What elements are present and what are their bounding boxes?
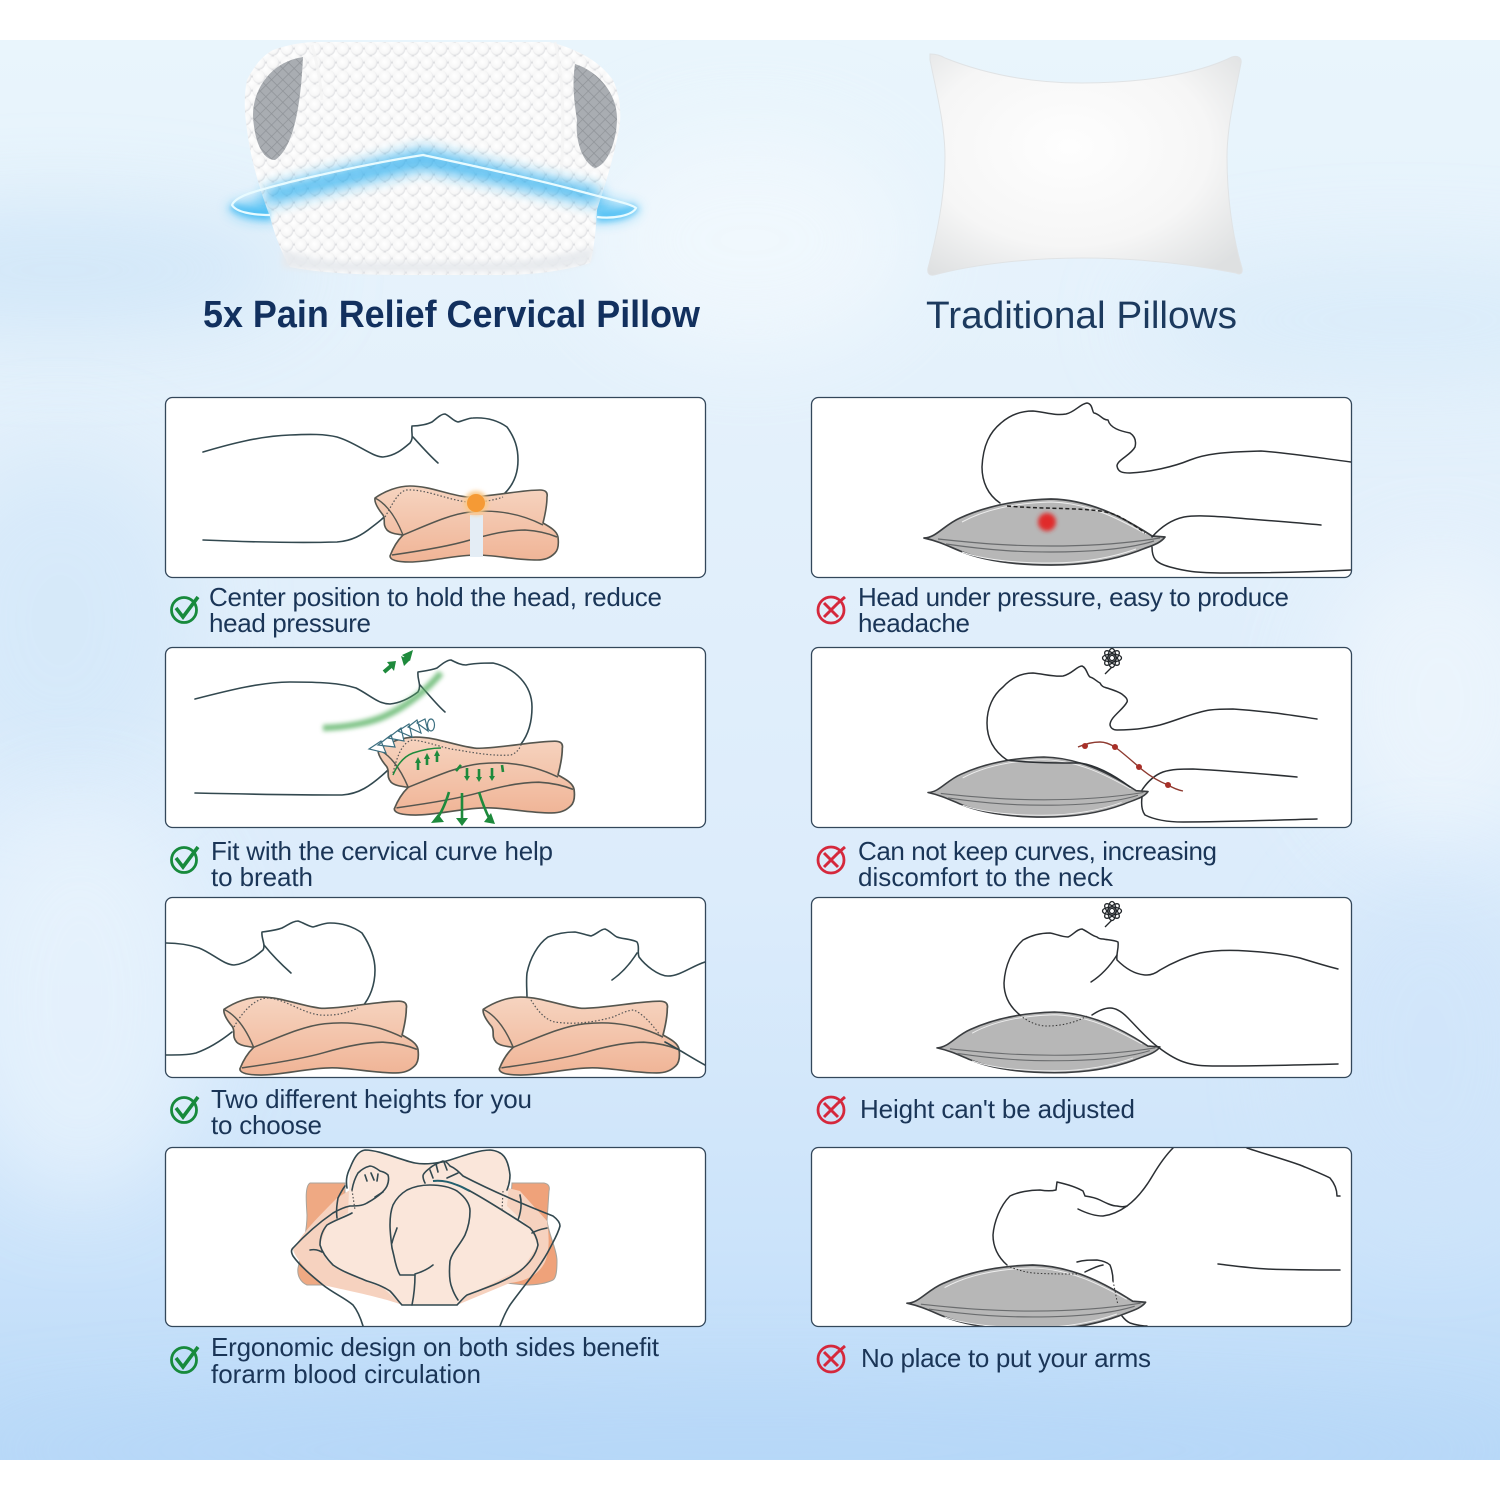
panel: center position illustration xyxy=(166,398,706,578)
caption: ergonomic design: Ergonomic design on both sides benefit xyxy=(211,1332,660,1362)
caption: two heights: to choose xyxy=(211,1110,322,1140)
caption: cervical curve: Fit with the cervical curve help xyxy=(211,836,553,866)
caption: no place for arms: No place to put your arms xyxy=(861,1343,1151,1373)
heading: Traditional Pillows: Traditional Pillows xyxy=(926,295,1237,337)
caption: ergonomic design xyxy=(172,1332,660,1389)
panel: cervical curve illustration xyxy=(166,648,706,828)
product photo: traditional pillow xyxy=(928,54,1242,275)
caption: center position: head pressure xyxy=(209,608,371,638)
caption: head under pressure: Head under pressure, easy to produce xyxy=(858,582,1289,612)
panel: neck discomfort illustration xyxy=(812,648,1352,828)
heading: 5x Pain Relief Cervical Pillow: 5x Pain Relief Cervical Pillow xyxy=(203,294,700,336)
panel: two heights illustration xyxy=(165,898,706,1078)
panel: no place for arms illustration xyxy=(812,1148,1352,1330)
caption: neck discomfort xyxy=(818,836,1217,892)
caption: two heights xyxy=(172,1084,532,1140)
caption: cervical curve xyxy=(172,836,553,892)
caption: neck discomfort: Can not keep curves, increasing xyxy=(858,836,1217,866)
caption: ergonomic design: forarm blood circulation xyxy=(211,1359,481,1389)
product photo: cervical pillow with blue highlight xyxy=(228,42,640,275)
panel: fixed height illustration xyxy=(812,898,1352,1078)
panel: head under pressure illustration xyxy=(812,398,1352,578)
panel: ergonomic arm space illustration xyxy=(166,1148,706,1326)
caption: two heights: Two different heights for you xyxy=(211,1084,532,1114)
caption: center position: Center position to hold the head, reduce xyxy=(209,582,662,612)
caption: head under pressure: headache xyxy=(858,608,970,638)
caption: height cannot be adjusted: Height can't be adjusted xyxy=(860,1094,1135,1124)
caption: head under pressure xyxy=(818,582,1289,638)
caption: neck discomfort: discomfort to the neck xyxy=(858,862,1114,892)
caption: center position xyxy=(172,582,662,638)
caption: cervical curve: to breath xyxy=(211,862,313,892)
